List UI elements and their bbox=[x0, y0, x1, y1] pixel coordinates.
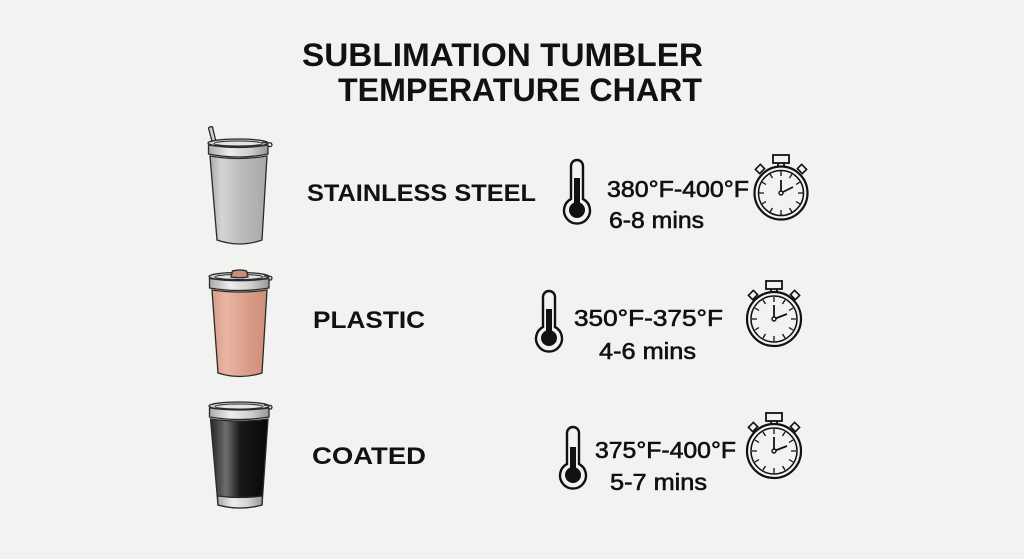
temperature and time bbox=[595, 437, 736, 495]
icon: thermometer bbox=[560, 427, 586, 489]
temperature and time: 6-8 mins bbox=[609, 207, 704, 233]
icon: stopwatch bbox=[747, 281, 801, 346]
label: coated: COATED bbox=[312, 443, 426, 470]
temperature and time bbox=[607, 176, 749, 233]
row: plastic bbox=[209, 270, 801, 376]
temperature and time: 5-7 mins bbox=[610, 469, 707, 495]
temperature and time: 380°F-400°F bbox=[607, 176, 749, 202]
temperature and time: 4-6 mins bbox=[599, 338, 696, 364]
temperature and time bbox=[574, 305, 723, 364]
row: coated bbox=[209, 402, 801, 508]
temperature and time: 375°F-400°F bbox=[595, 437, 736, 463]
icon: stainless steel tumbler bbox=[208, 127, 272, 244]
label: stainless steel: STAINLESS STEEL bbox=[307, 180, 536, 207]
icon: stopwatch bbox=[754, 155, 808, 220]
icon: plastic tumbler bbox=[209, 270, 272, 376]
label: plastic: PLASTIC bbox=[313, 307, 425, 334]
icon: coated tumbler bbox=[209, 402, 272, 508]
temperature and time: 350°F-375°F bbox=[574, 305, 723, 331]
title: TEMPERATURE CHART bbox=[338, 72, 702, 108]
title bbox=[302, 37, 703, 108]
row: stainless steel bbox=[208, 127, 808, 244]
icon: thermometer bbox=[536, 291, 562, 352]
icon: stopwatch bbox=[747, 413, 801, 478]
icon: thermometer bbox=[564, 160, 590, 224]
title: SUBLIMATION TUMBLER bbox=[302, 37, 703, 73]
